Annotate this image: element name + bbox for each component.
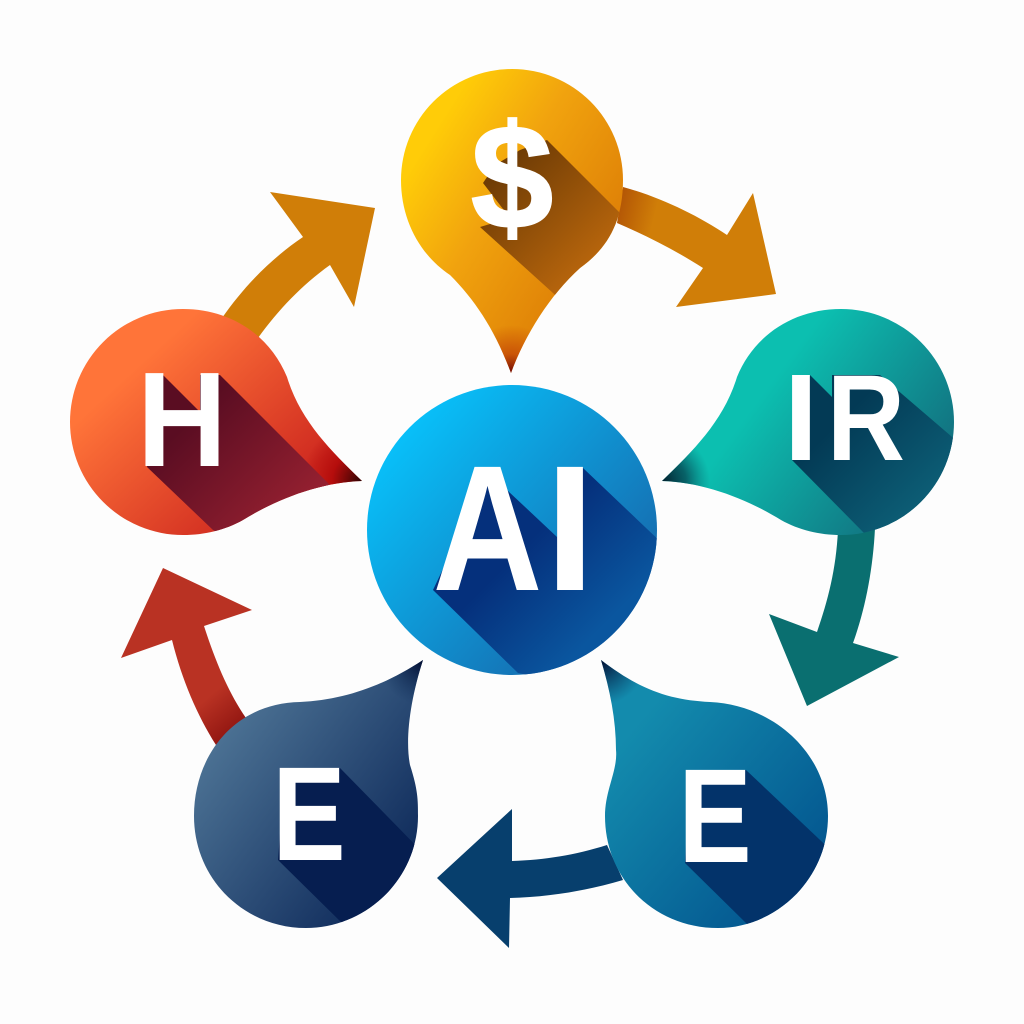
pin: lower-right E: [601, 660, 828, 928]
letters AI: I: [545, 428, 595, 628]
arrow: H to dollar: [222, 192, 375, 338]
arrow: IR to lower E: [769, 528, 899, 706]
pin: IR: [662, 309, 954, 535]
center circle: AI: [367, 385, 665, 690]
letters AI: A: [433, 429, 542, 629]
letter E: E: [272, 739, 346, 888]
letter H: H: [137, 345, 227, 495]
pin: H: [70, 309, 362, 535]
letters IR: [784, 349, 905, 487]
letters IR: I: [784, 350, 818, 487]
arrow: lower-left E to H: [121, 568, 252, 745]
pin: dollar: [401, 69, 623, 373]
icon: dollar sign: $: [471, 95, 553, 260]
pin: lower-left E: [194, 660, 423, 928]
arrow: dollar to IR: [617, 187, 776, 307]
letter E: E: [678, 741, 752, 890]
letters IR: R: [827, 349, 905, 487]
letters AI: [433, 428, 595, 629]
arrow: lower E to lower-left E: [437, 809, 623, 948]
